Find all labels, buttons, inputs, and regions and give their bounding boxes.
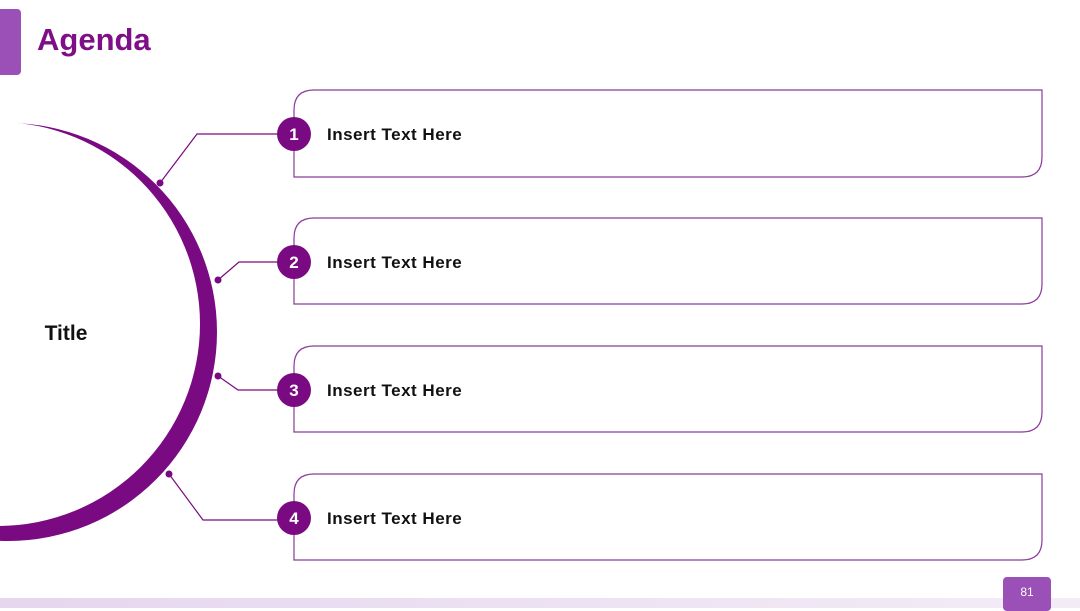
number badge 2: 2 <box>289 253 299 272</box>
connector 2 <box>214 262 278 284</box>
number badge 4: 4 <box>289 509 299 528</box>
page number <box>1003 577 1051 611</box>
item text 1: Insert Text Here <box>327 125 462 144</box>
connector 3 <box>214 372 278 390</box>
box 1 <box>294 90 1042 177</box>
item text 3: Insert Text Here <box>327 381 462 400</box>
connector 4 <box>166 470 278 520</box>
number badge 4 <box>277 501 311 535</box>
box 3 <box>294 346 1042 432</box>
item text 2: Insert Text Here <box>327 253 462 272</box>
item text 4: Insert Text Here <box>327 509 462 528</box>
box 4 <box>294 474 1042 560</box>
title: Agenda <box>37 22 151 57</box>
number badge 3: 3 <box>289 381 299 400</box>
page number: 81 <box>1020 585 1034 599</box>
crescent arc <box>0 122 217 541</box>
title accent bar <box>0 9 21 75</box>
number badge 3 <box>277 373 311 407</box>
number badge 2 <box>277 245 311 279</box>
connector 1 <box>156 134 278 186</box>
center title: Title <box>45 322 87 345</box>
number badge 1 <box>277 117 311 151</box>
number badge 1: 1 <box>289 125 299 144</box>
bottom band <box>0 598 1080 608</box>
box 2 <box>294 218 1042 304</box>
